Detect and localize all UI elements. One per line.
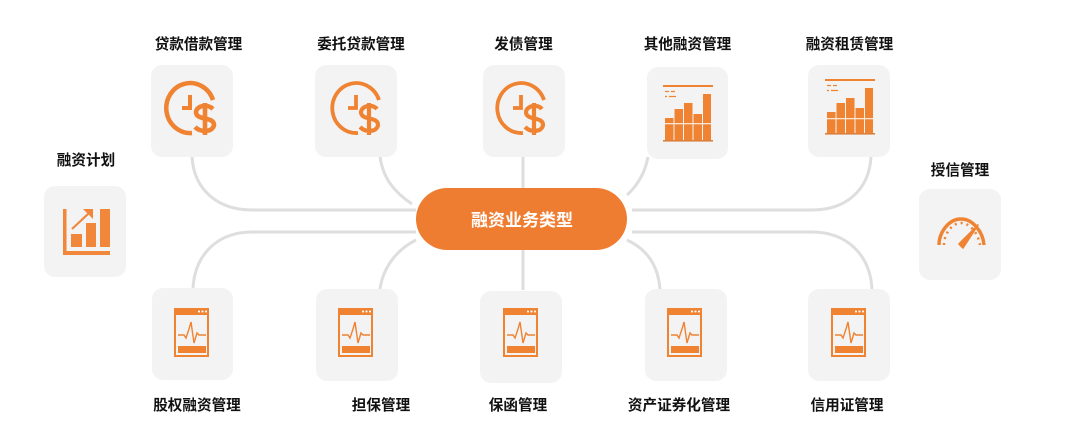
- node: 授信管理: [919, 161, 1001, 280]
- node: 其他融资管理: 其他融资管理: [644, 35, 732, 53]
- node: 股权融资管理: [152, 288, 241, 414]
- node: 融资计划: 融资计划: [57, 152, 115, 169]
- node: 融资计划: [44, 152, 126, 277]
- node: 担保管理: [316, 289, 411, 414]
- node: 资产证券化管理: [628, 289, 730, 414]
- node: 融资租赁管理: [806, 35, 894, 157]
- connector lines: [192, 157, 872, 290]
- node: 其他融资管理: [644, 35, 732, 159]
- node: 授信管理: 授信管理: [931, 161, 990, 179]
- node: 信用证管理: 信用证管理: [811, 396, 884, 414]
- node: 融资租赁管理: 融资租赁管理: [806, 35, 894, 53]
- node: 发债管理: [483, 35, 565, 157]
- node: 发债管理: 发债管理: [494, 35, 553, 53]
- node: 贷款借款管理: 贷款借款管理: [155, 35, 243, 53]
- node: 保函管理: [480, 291, 562, 414]
- node: 股权融资管理: 股权融资管理: [153, 396, 241, 414]
- node: 保函管理: 保函管理: [489, 396, 548, 414]
- node: 委托贷款管理: 委托贷款管理: [317, 35, 405, 53]
- node: 资产证券化管理: 资产证券化管理: [628, 396, 730, 414]
- node: 委托贷款管理: [315, 35, 405, 157]
- central pill: 融资业务类型: 融资业务类型: [471, 211, 573, 230]
- central pill: 融资业务类型: [416, 188, 627, 250]
- node: 贷款借款管理: [151, 35, 243, 157]
- node: 担保管理: 担保管理: [352, 396, 411, 414]
- node: 信用证管理: [808, 289, 890, 414]
